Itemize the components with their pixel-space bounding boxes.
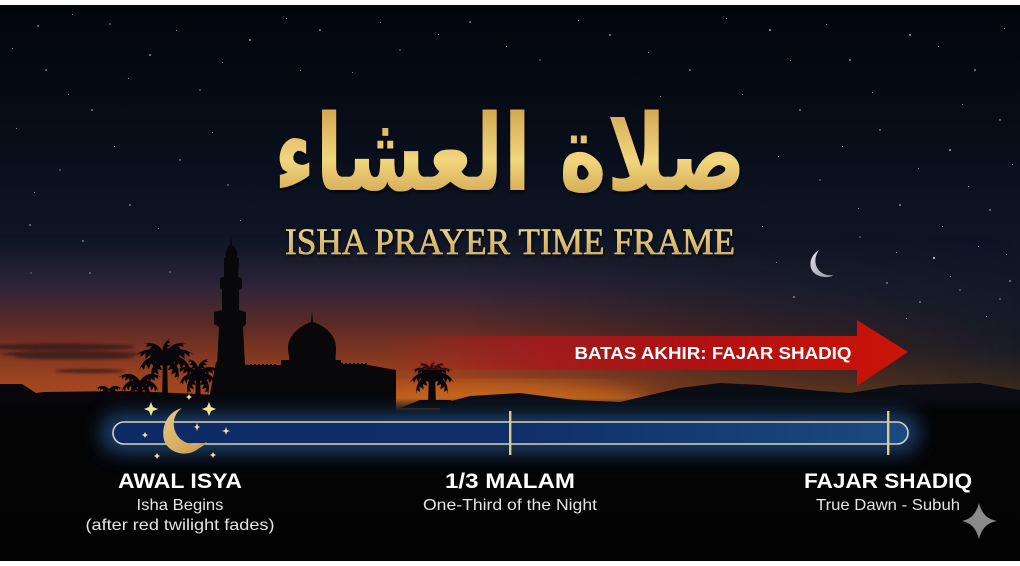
- label: Fajar Shadiq: True Dawn - Subuh: [816, 497, 960, 514]
- palm trees: [0, 337, 470, 420]
- marker: one third: [509, 411, 511, 455]
- English title: ISHA PRAYER TIME FRAME: [285, 222, 735, 263]
- palm: right: [408, 359, 456, 405]
- label: Awal Isya: (after red twilight fades): [86, 517, 274, 534]
- palm: behind minaret: [176, 356, 220, 408]
- icon: grey four-point star: [962, 503, 997, 539]
- palm: large: [136, 337, 194, 398]
- mosque silhouette: [205, 235, 396, 420]
- label: Awal Isya: [86, 470, 274, 534]
- minaret: [214, 235, 246, 365]
- label: 1/3 Malam: One-Third of the Night: [423, 497, 598, 514]
- timeline bar: [100, 411, 920, 455]
- palm: tiny left: [96, 385, 122, 397]
- label: Awal Isya: Isha Begins: [136, 497, 224, 514]
- label: 1/3 Malam: [423, 470, 598, 514]
- foreground ground: [0, 398, 1020, 561]
- arrow label: BATAS AKHIR: FAJAR SHADIQ: [574, 343, 852, 363]
- Arabic title: صلاة العشاء: [274, 92, 746, 215]
- dome: [288, 311, 336, 362]
- crescent moon in the sky: [810, 250, 833, 277]
- label: Awal Isya: AWAL ISYA: [118, 470, 242, 493]
- mosque body: [205, 360, 396, 420]
- label: Fajar Shadiq: [804, 470, 972, 514]
- low buildings left: [0, 384, 220, 420]
- icon: golden crescent with sparkles: [142, 394, 230, 459]
- marker: fajar: [887, 411, 889, 455]
- distant mountains silhouette: [440, 383, 1020, 430]
- background: night sky with twilight: [0, 5, 1020, 410]
- label: 1/3 Malam: 1/3 MALAM: [445, 470, 575, 493]
- palm: small left: [118, 371, 162, 407]
- stars: [12, 14, 1013, 319]
- balustrades: [250, 363, 367, 370]
- label: Fajar Shadiq: FAJAR SHADIQ: [804, 470, 972, 493]
- red arrow: deadline: [380, 320, 908, 386]
